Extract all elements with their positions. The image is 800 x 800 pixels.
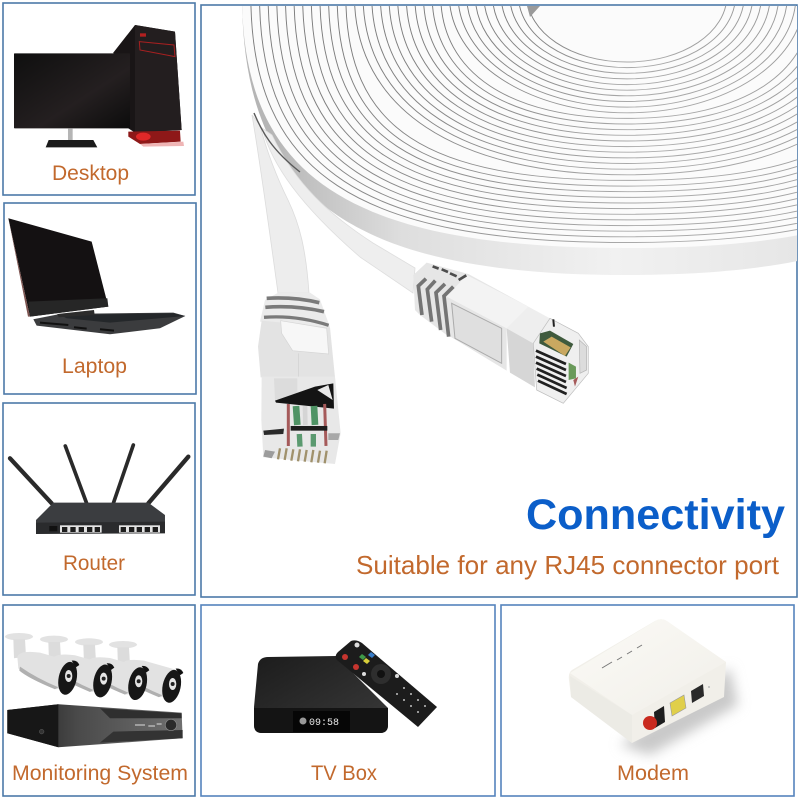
heading: connectivity: Connectivity — [526, 491, 785, 539]
coil of flat cable — [242, 0, 800, 275]
panel: router — [3, 403, 195, 595]
subheading: Suitable for any RJ45 connector port — [356, 550, 780, 580]
icon: right RJ45 connector — [413, 263, 588, 403]
panel: modem — [501, 605, 794, 796]
label: router: Router — [63, 552, 125, 575]
icon: tv box and remote — [254, 640, 437, 733]
panel: connectivity — [201, 0, 800, 597]
icon: desktop computer — [14, 25, 184, 147]
cable to left connector — [252, 115, 309, 293]
label: tv box: TV Box — [311, 762, 377, 785]
icon: left RJ45 connector — [258, 293, 341, 464]
panel: tv box — [201, 605, 495, 796]
icon: cameras and recorder — [5, 633, 184, 747]
label: desktop: Desktop — [52, 162, 129, 185]
panel: laptop — [4, 203, 196, 394]
label: monitoring system: Monitoring System — [12, 762, 188, 785]
panel: desktop — [3, 3, 195, 195]
label: modem: Modem — [617, 762, 689, 785]
cable to right connector — [254, 113, 415, 293]
icon: laptop — [8, 218, 185, 334]
icon: modem — [569, 619, 738, 755]
panel: monitoring system — [3, 605, 195, 796]
icon: router — [10, 445, 188, 534]
icon: tv box and remote: 09:58 — [309, 718, 339, 729]
label: laptop: Laptop — [62, 355, 127, 378]
